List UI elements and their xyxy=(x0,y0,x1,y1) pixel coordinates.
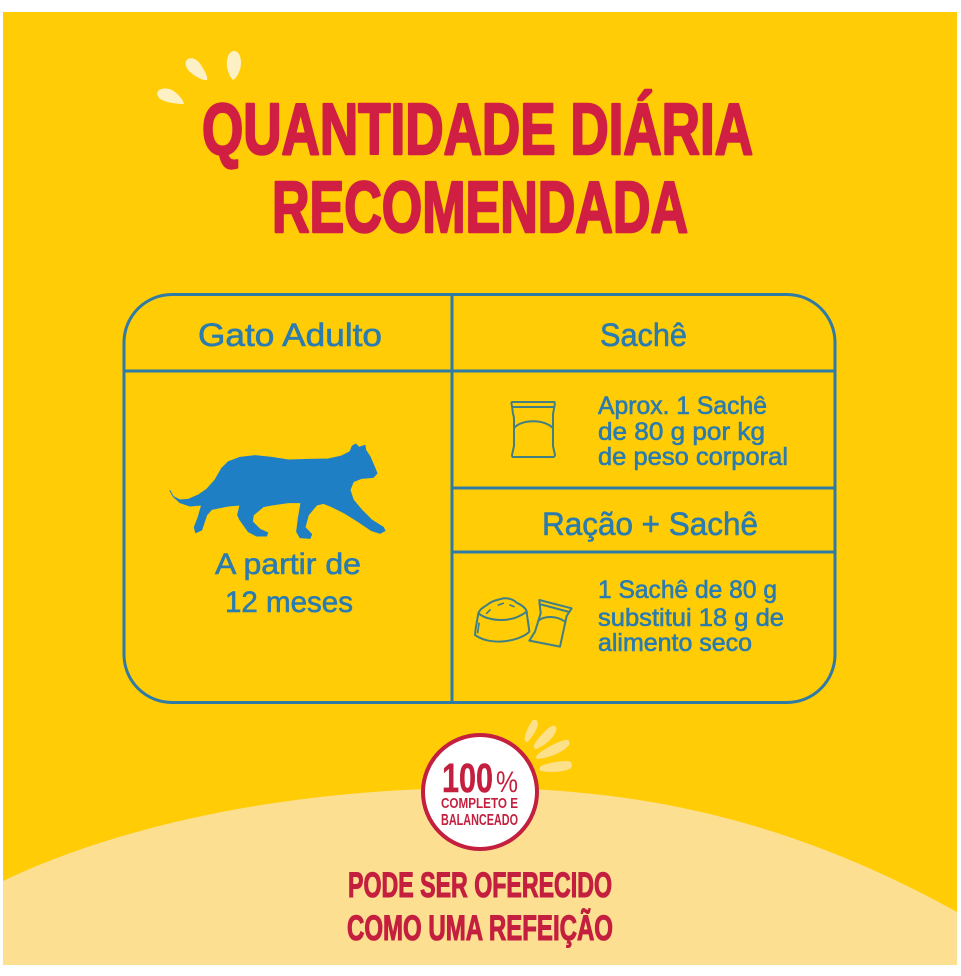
footer text xyxy=(347,866,613,948)
text: A partir de 12 meses: A partir de xyxy=(215,548,361,581)
badge text: 100%: 100 xyxy=(442,755,493,801)
text: A partir de 12 meses: 12 meses xyxy=(225,586,353,619)
icon: sachet xyxy=(511,402,555,457)
badge text: completo e balanceado xyxy=(441,795,518,829)
heading: Sachê: Sachê xyxy=(600,317,687,353)
title: RECOMENDADA xyxy=(272,168,688,248)
table xyxy=(124,294,835,703)
text: ration and sachet equivalence xyxy=(598,576,784,657)
text: ration and sachet equivalence: 1 Sachê de 80 g xyxy=(598,576,777,604)
table grid lines xyxy=(124,294,835,703)
title xyxy=(202,90,753,248)
title: QUANTIDADE DIÁRIA xyxy=(202,90,753,170)
text: ration and sachet equivalence: alimento seco xyxy=(598,629,752,657)
footer text: COMO UMA REFEIÇÃO xyxy=(347,909,613,948)
text: sachet quantity: de peso corporal xyxy=(598,443,788,471)
icon: badge rays xyxy=(525,720,572,772)
badge text: completo e balanceado: COMPLETO E xyxy=(441,795,518,812)
icon: title sparkle drops xyxy=(157,51,241,104)
text: A partir de 12 meses xyxy=(215,548,361,619)
text: sachet quantity xyxy=(598,392,788,471)
footer text: PODE SER OFERECIDO xyxy=(348,866,612,905)
text: ration and sachet equivalence: substitui 18 g de xyxy=(598,604,784,632)
icon: cat silhouette xyxy=(170,444,385,538)
badge text: 100%: % xyxy=(496,766,518,799)
badge text: completo e balanceado: BALANCEADO xyxy=(441,812,518,829)
cream arc at the bottom xyxy=(3,788,957,965)
badge circle xyxy=(423,735,537,849)
heading: Gato Adulto: Gato Adulto xyxy=(198,317,382,353)
text: sachet quantity: Aprox. 1 Sachê xyxy=(598,392,767,420)
badge xyxy=(423,735,537,849)
heading: Ração + Sachê: Ração + Sachê xyxy=(542,506,758,542)
text: sachet quantity: de 80 g por kg xyxy=(598,418,765,446)
icon: bowl and sachet xyxy=(475,598,572,647)
